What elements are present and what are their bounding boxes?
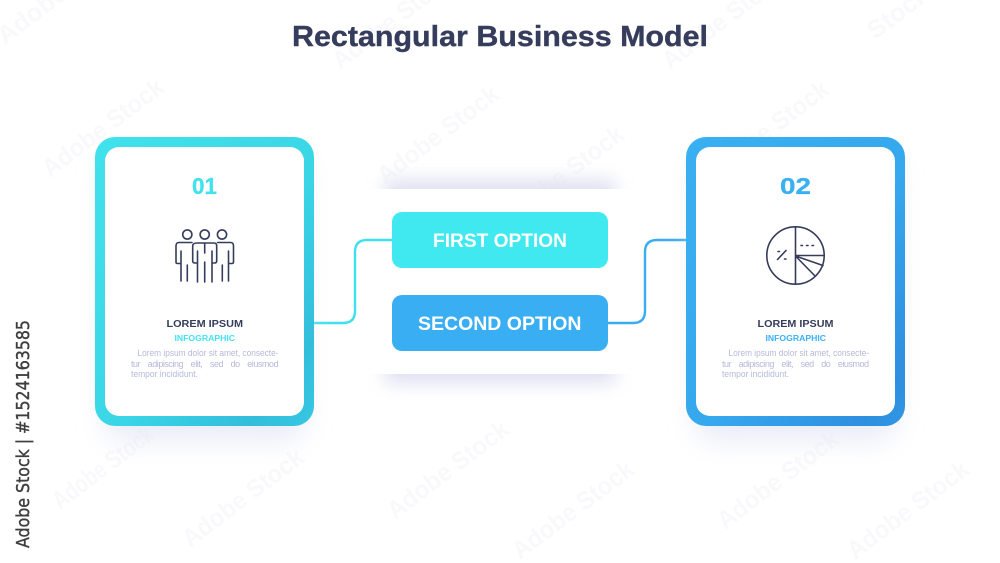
text block: tur adipiscing elit, sed do eiusmod (722, 359, 869, 369)
button: first option (392, 212, 608, 268)
connector: second option to card 02 (607, 240, 687, 323)
heading: lorem ipsum: LOREM IPSUM (758, 318, 834, 330)
panel: card 02 (686, 137, 905, 440)
heading: lorem ipsum: LOREM IPSUM (166, 318, 243, 330)
watermark pattern: Adobe Stock (712, 425, 844, 535)
connector: first option to card 01 (314, 240, 393, 323)
subheading: infographic: INFOGRAPHIC (174, 333, 235, 343)
watermark pattern: Adobe Stock (47, 420, 160, 515)
watermark pattern: Adobe Stock (842, 455, 974, 563)
panel: central backdrop (340, 180, 660, 383)
button: second option: SECOND OPTION (418, 314, 582, 335)
icon: pie chart (767, 227, 824, 284)
panel: card 01 (95, 137, 314, 440)
number 02: 02 (780, 173, 811, 199)
text block: tempor incididunt. (722, 369, 789, 379)
watermark pattern: Adobe Stock (507, 455, 639, 563)
watermark pattern: Adobe Stock (382, 415, 514, 525)
watermark pattern: Adobe Stock (372, 80, 504, 190)
subheading: infographic: INFOGRAPHIC (766, 333, 826, 343)
icon: three people (176, 230, 234, 282)
text block (722, 348, 869, 379)
watermark pattern: Adobe Stock (497, 120, 629, 230)
button: first option: FIRST OPTION (433, 231, 567, 252)
text block: Lorem ipsum dolor sit amet, consecte- (728, 348, 869, 358)
number 01: 01 (192, 173, 217, 199)
watermark pattern: Adobe Stock (702, 75, 834, 185)
text block: tempor incididunt. (131, 369, 198, 379)
stock credit: Adobe Stock | #1524163585 (13, 320, 34, 548)
watermark pattern: Adobe Stock (37, 73, 169, 183)
watermark pattern: Adobe Stock (177, 443, 309, 553)
title: Rectangular Business Model (292, 21, 708, 53)
text block: tur adipiscing elit, sed do eiusmod (131, 359, 278, 369)
text block (131, 348, 279, 379)
button: second option (392, 295, 608, 351)
text block: Lorem ipsum dolor sit amet, consecte- (138, 348, 279, 358)
